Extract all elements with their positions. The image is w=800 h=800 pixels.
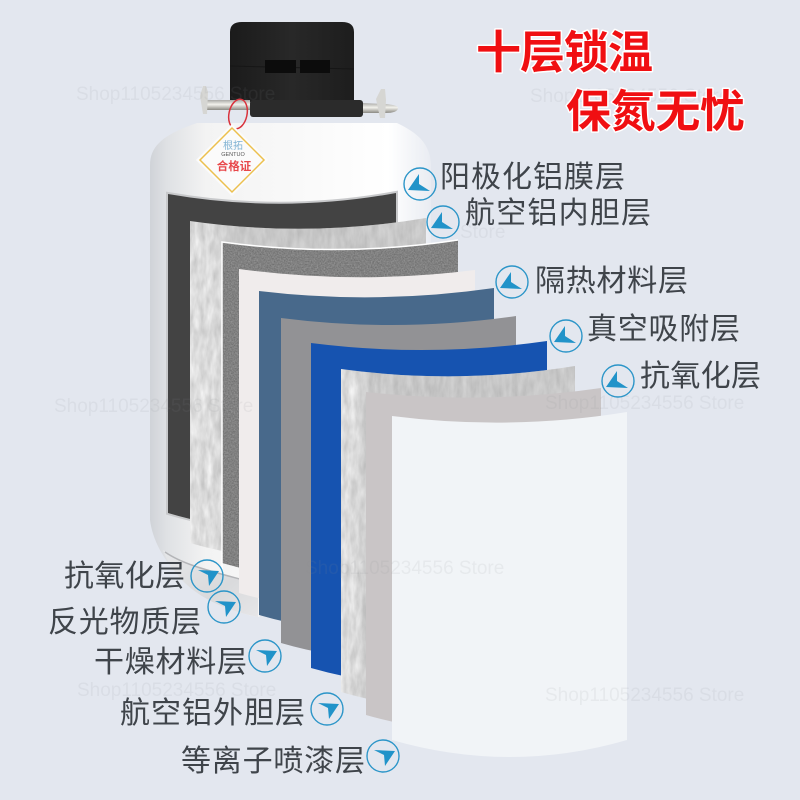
title line 2: 保氮无忧	[566, 86, 745, 137]
rubber grip	[250, 100, 363, 117]
layer 6: grey layer	[281, 316, 516, 660]
watermarks: Shop1105234556 Store	[77, 680, 276, 701]
icon: marker anti-oxidation left	[191, 560, 223, 592]
certificate tag: 根拓	[223, 139, 243, 152]
insulation layers stack	[168, 193, 627, 757]
icon: marker outer liner	[311, 693, 343, 725]
watermarks	[54, 84, 744, 706]
layer 10: white plasma paint layer	[392, 412, 627, 757]
certificate tag: GENTUO	[221, 152, 245, 158]
left labels	[48, 560, 399, 778]
watermarks: Shop1105234556 Store	[545, 393, 744, 414]
label: aviation aluminium inner liner layer: 航空铝内胆层	[465, 197, 651, 230]
tank illustration	[150, 22, 431, 617]
label: reflective material layer: 反光物质层	[48, 606, 201, 639]
icon: marker anodized film	[404, 168, 436, 200]
right labels	[404, 161, 761, 397]
label: plasma paint layer: 等离子喷漆层	[181, 745, 365, 778]
cap slots	[265, 60, 330, 73]
layer 4: off-white film	[239, 269, 475, 610]
watermarks: Shop1105234556 Store	[305, 558, 504, 579]
icon: marker inner liner	[427, 206, 459, 238]
tank lower band shading	[163, 550, 258, 617]
icon: marker vacuum adsorption	[550, 320, 582, 352]
icon: marker insulation	[496, 266, 528, 298]
watermarks: Shop1105234556 Store	[76, 84, 275, 105]
title line 1: 十层锁温	[476, 27, 653, 78]
certificate tag	[196, 124, 268, 196]
label: vacuum adsorption layer: 真空吸附层	[587, 313, 740, 346]
label: desiccant material layer: 干燥材料层	[94, 646, 247, 679]
layer 9: pale grey layer	[366, 388, 601, 732]
watermarks: Shop1105234556 Store	[530, 86, 729, 107]
layer 7: blue layer	[311, 341, 547, 685]
label: anodized aluminium film layer: 阳极化铝膜层	[440, 161, 625, 194]
layer 1: dark anodized film	[168, 193, 396, 530]
icon: marker desiccant	[249, 640, 281, 672]
layer 2: aviation aluminium inner liner	[190, 218, 426, 560]
label: anti-oxidation layer left: 抗氧化层	[64, 560, 185, 593]
black cap	[230, 22, 354, 102]
certificate tag: 合格证	[217, 159, 252, 173]
red string	[226, 97, 250, 131]
layer 8: silver aluminium layer	[341, 366, 575, 709]
watermarks: Store	[460, 222, 505, 243]
label: aviation aluminium outer liner layer: 航空铝外胆层	[120, 697, 305, 730]
layer 3: insulation material	[222, 240, 458, 580]
icon: marker anti-oxidation right	[602, 365, 634, 397]
watermarks: Shop1105234556 Store	[545, 685, 744, 706]
tank body	[150, 123, 431, 617]
icon: marker plasma paint	[367, 740, 399, 772]
tank bottom rim	[165, 552, 258, 584]
label: anti-oxidation layer right: 抗氧化层	[640, 360, 761, 393]
label: insulation material layer: 隔热材料层	[535, 265, 688, 298]
watermarks: Shop1105234556 Store	[54, 396, 253, 417]
icon: marker reflective	[208, 591, 240, 623]
carrying handle	[200, 86, 398, 118]
layer 5: steel blue vacuum layer	[259, 288, 494, 632]
